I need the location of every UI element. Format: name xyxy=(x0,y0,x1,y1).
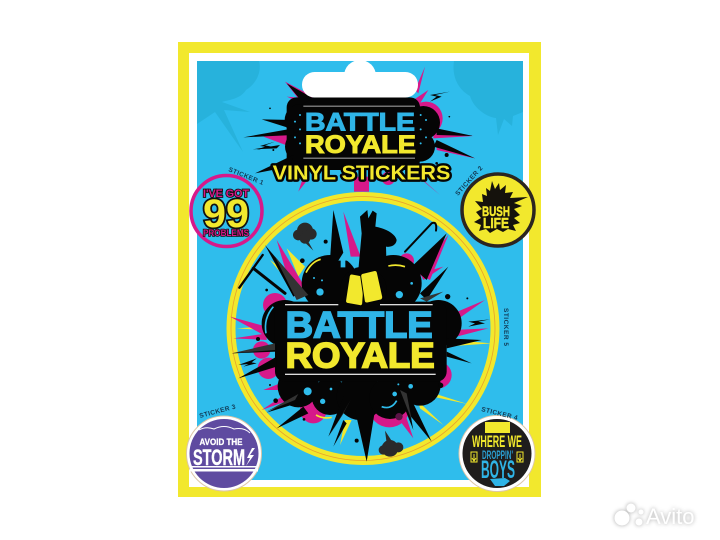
header title: ROYALE: ROYALE xyxy=(305,132,416,159)
yellow outer border xyxy=(178,42,541,497)
sticker 2 text: LIFE: LIFE xyxy=(483,215,509,232)
explosion grey spike highlights xyxy=(232,257,443,435)
icon: tree top xyxy=(293,223,317,251)
explosion black spikes xyxy=(232,210,490,462)
sticker 2: bush life xyxy=(454,165,534,246)
sticker 3: avoid the storm xyxy=(186,403,262,491)
label: sticker 5: STICKER 5 xyxy=(502,308,509,346)
sticker 4 text: WHERE WE: WHERE WE xyxy=(472,433,522,451)
sticker 3 text: AVOID THE: AVOID THE xyxy=(200,437,242,448)
icon: lightning bolt xyxy=(246,448,255,466)
header title: BATTLE: BATTLE xyxy=(305,109,415,136)
sticker 2 label: STICKER 2 xyxy=(454,165,485,197)
sticker 4: where we droppin' boys xyxy=(459,406,535,492)
sticker 4 label: STICKER 4 xyxy=(481,406,519,422)
Avito watermark: Avito xyxy=(646,504,695,529)
dark dot on magenta xyxy=(395,413,403,420)
icon: llama silhouette xyxy=(358,210,397,270)
icon: up arrow xyxy=(338,253,348,267)
hang hole xyxy=(302,60,418,98)
main title: BATTLE: BATTLE xyxy=(286,305,433,346)
blue background panel xyxy=(197,61,523,480)
sticker 1 text: PROBLEMS: PROBLEMS xyxy=(203,228,249,238)
sticker 3 cloud outline xyxy=(199,426,250,433)
cloud accents xyxy=(265,259,405,418)
icon: blue figure xyxy=(490,478,510,486)
icon: dog tags xyxy=(346,271,383,306)
icon: left drop arrow xyxy=(471,452,477,462)
main sticker rule lines xyxy=(285,304,436,375)
sticker 3 label: STICKER 3 xyxy=(199,403,237,420)
header black cloud and spikes xyxy=(243,83,475,173)
explosion black cloud xyxy=(262,255,462,420)
white inner border xyxy=(189,53,529,487)
main title: ROYALE: ROYALE xyxy=(286,336,435,375)
icon: right drop arrow xyxy=(517,452,523,462)
sticker 1: 99 problems xyxy=(191,166,265,246)
icon: pickaxe xyxy=(239,255,285,293)
sticker 3 white bands xyxy=(190,466,258,472)
main sticker: ring xyxy=(231,196,495,460)
main sticker: explosion xyxy=(230,210,492,462)
sticker 1 label: STICKER 1 xyxy=(227,166,265,187)
explosion yellow spikes xyxy=(237,248,492,445)
icon: crowbar xyxy=(405,223,436,252)
header rule lines xyxy=(303,106,415,159)
sticker 1 text: I'VE GOT: I'VE GOT xyxy=(203,188,249,200)
icon: tree bottom xyxy=(379,431,403,457)
icon: battle bus xyxy=(485,422,510,433)
explosion magenta shapes xyxy=(230,212,488,438)
sticker 4 text: DROPPIN': DROPPIN' xyxy=(482,448,513,462)
sticker 4: where we droppin' boys: BOYS xyxy=(481,456,515,484)
header subtitle: VINYL STICKERS: VINYL STICKERS xyxy=(273,162,450,184)
faded cloud: top left xyxy=(197,61,260,152)
sticker 3 text: STORM: STORM xyxy=(193,445,245,470)
sticker 2 text: BUSH: BUSH xyxy=(482,203,510,219)
header logo xyxy=(243,67,475,195)
sticker 1 text: 99: 99 xyxy=(203,192,249,236)
Avito watermark xyxy=(614,504,695,529)
faded cloud: top right xyxy=(454,61,523,135)
icon: bush splat xyxy=(474,181,528,233)
explosion blue dots xyxy=(304,277,413,404)
header magenta burst xyxy=(263,67,475,195)
header dots xyxy=(294,114,427,144)
